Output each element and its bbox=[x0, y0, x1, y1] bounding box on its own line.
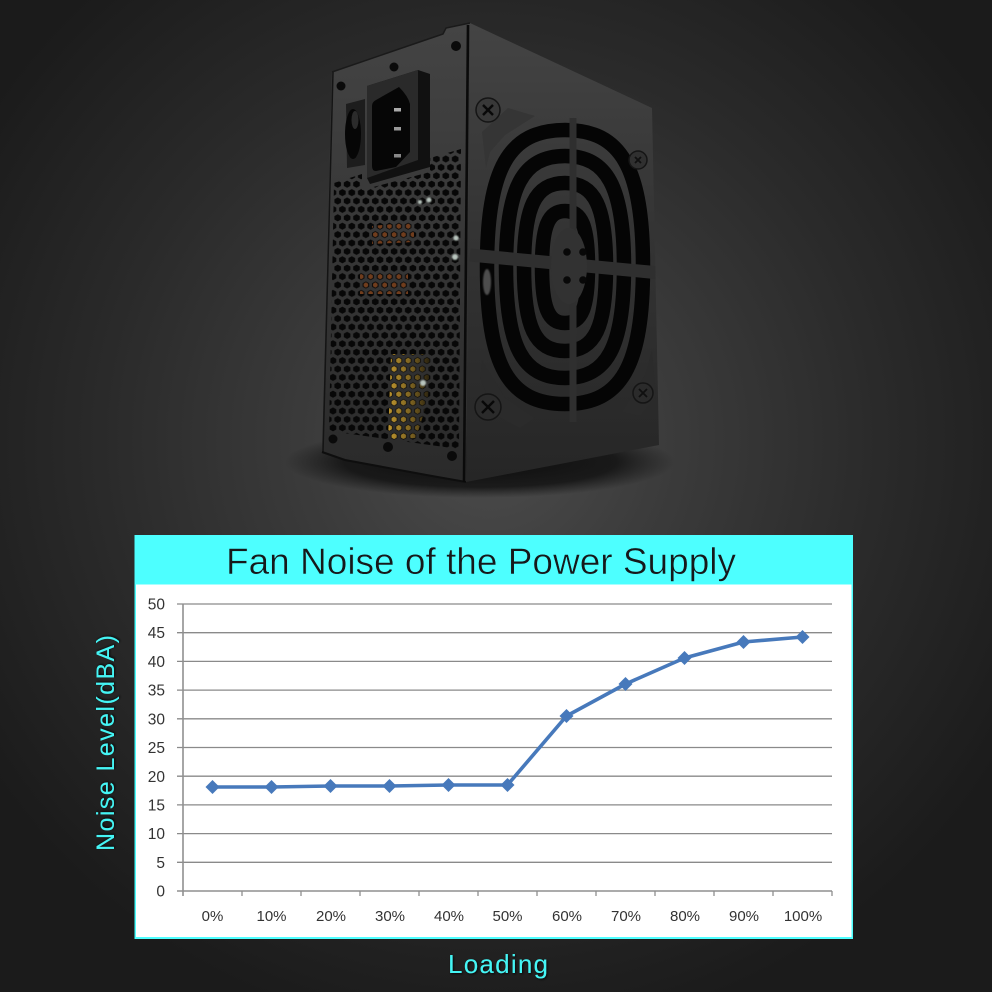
y axis tick labels: 5 bbox=[156, 855, 165, 872]
y axis tick labels: 25 bbox=[148, 740, 165, 757]
orange parts seen through the vent bbox=[372, 222, 414, 244]
x axis tick labels: 90% bbox=[729, 908, 759, 925]
x axis tick labels: 30% bbox=[375, 908, 405, 925]
x axis tick labels bbox=[202, 908, 822, 925]
corner bracket bottom right bbox=[622, 350, 656, 416]
panel frame bbox=[134, 535, 853, 939]
y axis tick labels: 15 bbox=[148, 798, 165, 814]
infographic canvas bbox=[96, 22, 879, 980]
y axis tick labels: 45 bbox=[148, 625, 165, 642]
floor shadow bbox=[285, 426, 675, 498]
x axis tick labels: 60% bbox=[552, 908, 582, 925]
fan blade highlight bbox=[483, 269, 491, 295]
screw bottom left bbox=[475, 394, 501, 420]
x axis tick labels: 0% bbox=[202, 908, 223, 925]
grille ribs bbox=[480, 118, 650, 412]
side panel with fan grille bbox=[464, 23, 660, 482]
corner bracket top left bbox=[482, 108, 535, 168]
y axis tick labels: 10 bbox=[148, 826, 165, 843]
y axis tick labels bbox=[148, 596, 165, 900]
centre hub with holes bbox=[563, 233, 587, 298]
x axis tick labels: 40% bbox=[434, 908, 464, 925]
chart title: Fan Noise of the Power Supply bbox=[226, 541, 736, 582]
fan grille bbox=[480, 118, 650, 412]
x axis tick labels: 20% bbox=[316, 908, 346, 925]
y axis tick labels: 0 bbox=[156, 884, 165, 900]
x axis title: Loading bbox=[448, 949, 548, 979]
hexagonal vent holes bbox=[329, 149, 461, 449]
yellow parts seen through the vent bbox=[388, 354, 430, 440]
y axis tick labels: 40 bbox=[148, 654, 165, 671]
screw holes bbox=[328, 41, 461, 461]
chart panel bbox=[134, 535, 853, 939]
y axis title: Noise Level(dBA) bbox=[92, 635, 120, 851]
rocker power switch bbox=[345, 99, 365, 168]
screw bottom right bbox=[633, 383, 653, 403]
screw top left bbox=[476, 98, 500, 122]
y axis tick labels: 20 bbox=[148, 769, 165, 786]
screw top right bbox=[629, 151, 647, 169]
x axis tick labels: 50% bbox=[492, 908, 523, 925]
data point markers bbox=[206, 630, 810, 794]
chart axes and ticks bbox=[177, 604, 832, 896]
gridlines bbox=[177, 604, 832, 862]
noise data line bbox=[206, 630, 810, 794]
mounting screws bbox=[475, 98, 653, 420]
y axis tick labels: 30 bbox=[148, 712, 165, 728]
power supply product image bbox=[285, 23, 675, 498]
plot background bbox=[136, 584, 852, 937]
x axis tick labels: 80% bbox=[670, 908, 700, 925]
corner bracket bottom left bbox=[480, 360, 535, 428]
x axis tick labels: 10% bbox=[256, 908, 287, 925]
x axis tick labels: 100% bbox=[784, 908, 822, 925]
y axis tick labels: 35 bbox=[148, 682, 165, 700]
x axis tick labels: 70% bbox=[611, 908, 641, 925]
light reflections in the vent bbox=[418, 198, 459, 386]
y axis tick labels: 50 bbox=[148, 596, 165, 614]
power inlet socket bbox=[367, 70, 430, 184]
back panel bbox=[322, 23, 470, 482]
